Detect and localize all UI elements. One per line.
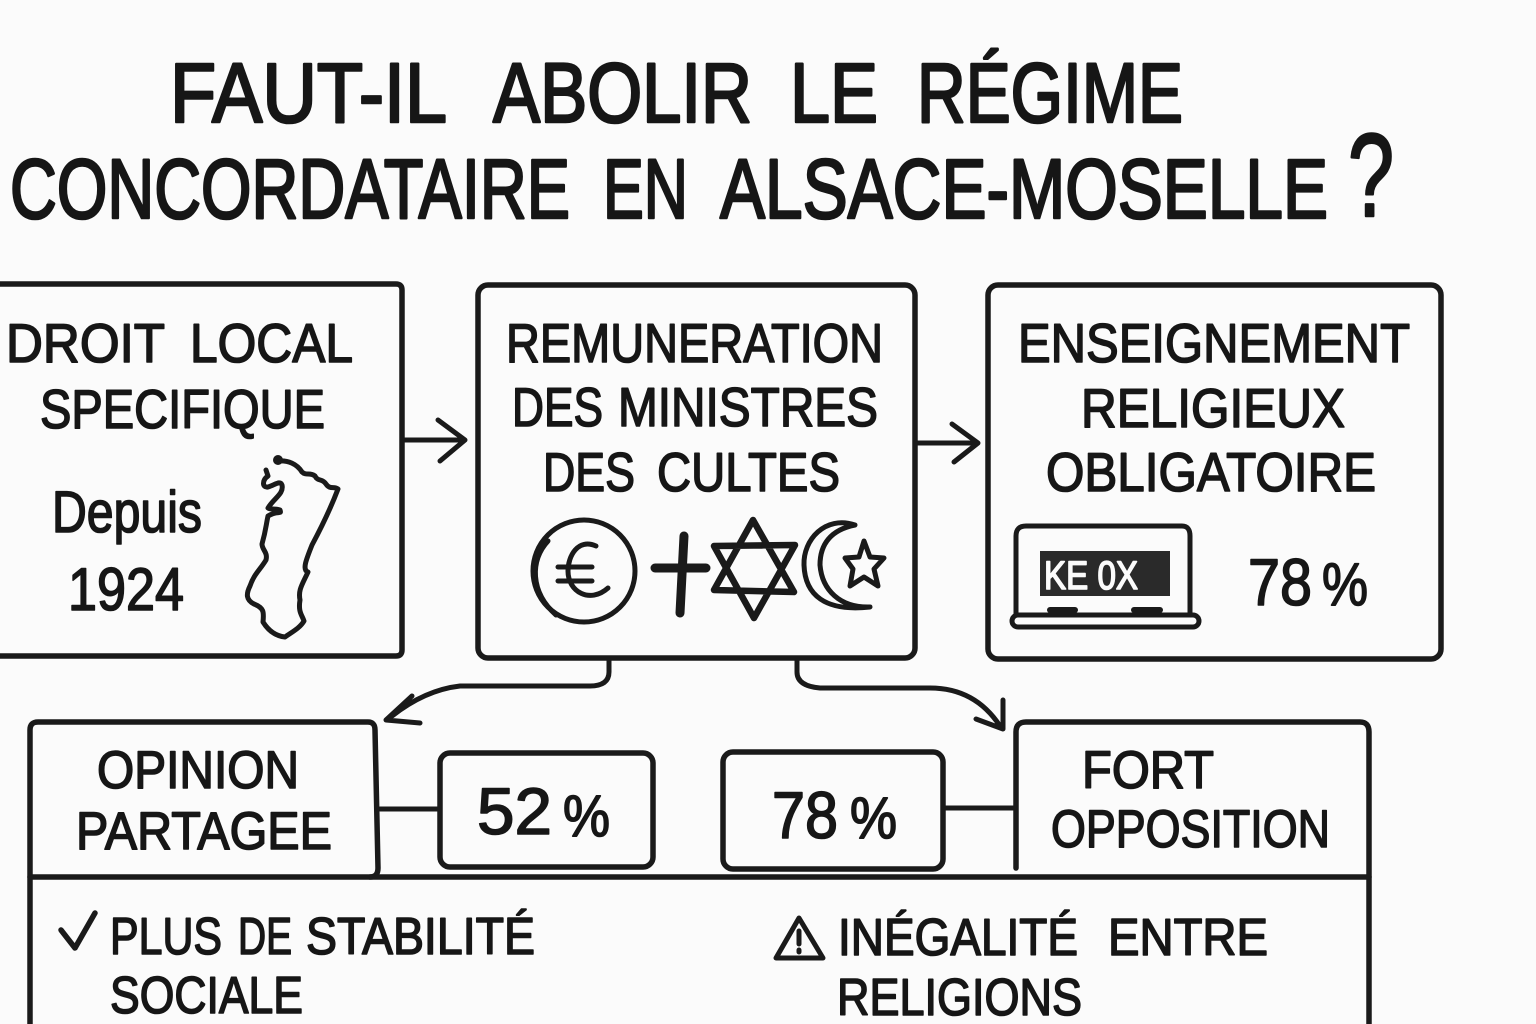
title: LE: [790, 46, 878, 140]
text: depuis 1924: [52, 480, 202, 623]
callout: 78%: %: [850, 786, 897, 851]
icon: crescent and star: [804, 523, 884, 608]
arrow: droit local to rémunération: [404, 420, 465, 461]
heading: enseignement: [1018, 312, 1410, 503]
text: depuis 1924: 1924: [68, 556, 184, 623]
heading: rémunération: CULTES: [657, 441, 840, 503]
stat: 78%: [1248, 545, 1368, 619]
heading: rémunération: REMUNERATION: [506, 312, 883, 374]
callout: 78%: [723, 752, 943, 869]
text: inégalité entre religions: ENTRE: [1108, 909, 1268, 967]
heading: fort opposition: FORT: [1082, 741, 1214, 800]
icon: laptop: KE 0X: [1044, 554, 1138, 598]
heading: rémunération: DES: [543, 441, 635, 503]
title: FAUT-IL: [170, 46, 447, 140]
title: EN: [603, 142, 688, 236]
heading: enseignement: OBLIGATOIRE: [1046, 441, 1376, 503]
panel: opinion partagée: [30, 722, 378, 877]
heading: droit local: LOCAL: [190, 312, 353, 374]
icon: check mark: [61, 913, 95, 948]
stat: 78%: 78: [1248, 545, 1312, 619]
text: plus de stabilité sociale: DE: [238, 908, 292, 966]
title: ABOLIR: [493, 46, 752, 140]
icon: laptop: [1012, 526, 1199, 627]
text: plus de stabilité sociale: STABILITÉ: [306, 908, 535, 966]
text: inégalité entre religions: INÉGALITÉ: [838, 909, 1078, 967]
connector: opinion to 52%: [380, 806, 440, 812]
panel: arguments: [30, 877, 1369, 1024]
heading: droit local: DROIT: [6, 312, 165, 374]
heading: droit local: [6, 312, 353, 440]
text: inégalité entre religions: [837, 909, 1268, 1024]
title: [10, 46, 1394, 242]
panel: rémunération des ministres des cultes: [478, 285, 915, 658]
icon: star of David: [714, 520, 795, 618]
title: ALSACE-MOSELLE: [720, 142, 1328, 236]
heading: fort opposition: [1051, 741, 1330, 859]
arrow: to opinion partagée: [386, 660, 609, 723]
panel: enseignement religieux obligatoire: [988, 285, 1441, 659]
text: depuis 1924: Depuis: [52, 480, 202, 545]
heading: opinion partagée: PARTAGEE: [76, 802, 332, 861]
panel: fort opposition: [1016, 722, 1369, 877]
connector: 78% to fort opposition: [945, 806, 1016, 810]
title: CONCORDATAIRE: [10, 142, 570, 236]
text: plus de stabilité sociale: SOCIALE: [110, 967, 303, 1024]
icon: warning triangle: [776, 918, 823, 958]
icon: map of Alsace-Moselle: [247, 455, 338, 637]
heading: rémunération: MINISTRES: [618, 376, 878, 438]
heading: rémunération: [506, 312, 883, 503]
icon: cross: [655, 536, 706, 613]
callout: 52%: %: [563, 784, 610, 849]
callout: 78%: 78: [772, 778, 838, 852]
arrow: to fort opposition: [797, 660, 1003, 729]
icon: euro coin: [533, 520, 635, 622]
heading: opinion partagée: OPINION: [97, 741, 299, 800]
heading: rémunération: DES: [512, 376, 603, 438]
panel: droit local spécifique: [0, 284, 402, 656]
heading: enseignement: ENSEIGNEMENT: [1018, 312, 1410, 374]
stat: 78%: %: [1322, 551, 1368, 618]
heading: enseignement: RELIGIEUX: [1081, 377, 1345, 439]
text: plus de stabilité sociale: PLUS: [110, 908, 222, 966]
callout: 52%: [440, 753, 653, 867]
heading: droit local: SPECIFIQUE: [40, 378, 325, 440]
arrow: rémunération to enseignement: [917, 424, 978, 462]
title: RÉGIME: [917, 46, 1183, 140]
heading: opinion partagée: [76, 741, 332, 861]
title: ?: [1348, 110, 1394, 242]
callout: 52%: 52: [477, 774, 552, 848]
text: plus de stabilité sociale: [110, 908, 535, 1024]
heading: fort opposition: OPPOSITION: [1051, 800, 1330, 859]
